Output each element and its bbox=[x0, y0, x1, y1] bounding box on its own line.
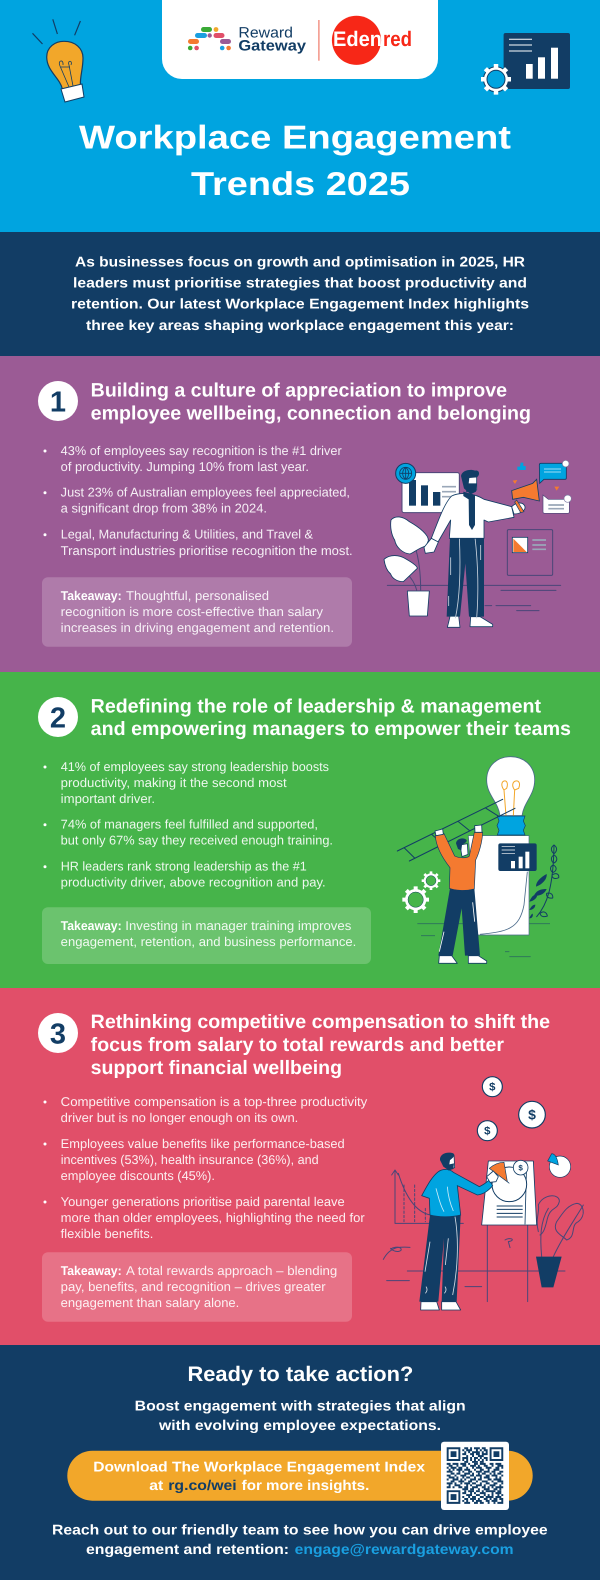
man bbox=[424, 470, 525, 627]
coins bbox=[477, 1077, 545, 1141]
intro text bbox=[71, 255, 529, 334]
bullet list 3: flexible benefits. bbox=[61, 1227, 153, 1241]
bullet list 2: HR leaders rank strong leadership as the #1 bbox=[61, 860, 307, 874]
bullet list 3: Competitive compensation is a top-three productivity bbox=[61, 1095, 368, 1109]
bullet list 1: 43% of employees say recognition is the #1 driver bbox=[61, 444, 342, 458]
heading 2: and empowering managers to empower their teams bbox=[91, 718, 571, 740]
bullet list 1: Legal, Manufacturing & Utilities, and Travel & bbox=[61, 528, 314, 542]
line chart bbox=[392, 1170, 463, 1223]
logo: Reward Gateway wordmark: Reward bbox=[238, 25, 293, 42]
chart panel bbox=[498, 843, 537, 871]
logo: Edenred: red bbox=[383, 28, 412, 51]
CTA subheading: with evolving employee expectations. bbox=[158, 1418, 441, 1434]
heading 2 bbox=[91, 696, 571, 740]
speech bubbles bbox=[513, 460, 571, 513]
board with card bbox=[507, 530, 553, 575]
bullet list 2 bbox=[44, 760, 333, 890]
plants bbox=[529, 845, 559, 918]
icon: chart with gear bbox=[481, 33, 570, 95]
takeaway 1: recognition is more cost-effective than salary bbox=[61, 605, 324, 619]
bullet list 2: 74% of managers feel fulfilled and supported, bbox=[61, 818, 318, 832]
contact text: Reach out to our friendly team to see how you can drive employee bbox=[52, 1522, 548, 1538]
bullet list 3: driver but is no longer enough on its own. bbox=[61, 1111, 298, 1125]
illustration: man with megaphone bbox=[384, 460, 571, 627]
bullet list 2: important driver. bbox=[61, 792, 155, 806]
bullet list 2: but only 67% say they received enough training. bbox=[61, 834, 333, 848]
contact text: engagement and retention: bbox=[86, 1542, 289, 1558]
takeaway 3: engagement than salary alone. bbox=[61, 1296, 239, 1310]
bullet list 3 bbox=[44, 1095, 368, 1241]
heading 3: focus from salary to total rewards and better bbox=[91, 1034, 504, 1056]
intro text: As businesses focus on growth and optimisation in 2025, HR bbox=[75, 255, 525, 271]
pie icon bbox=[548, 1154, 571, 1177]
heading 3: Rethinking competitive compensation to shift the bbox=[91, 1011, 550, 1033]
logo card bbox=[162, 0, 438, 79]
bullet list 1: a significant drop from 38% in 2024. bbox=[61, 502, 267, 516]
gears bbox=[402, 871, 440, 913]
CTA subheading bbox=[135, 1399, 466, 1434]
plant bbox=[384, 517, 429, 616]
flip chart: $ bbox=[518, 1164, 523, 1173]
panel: section 2 leadership bbox=[0, 672, 600, 988]
takeaway 1 bbox=[42, 577, 352, 647]
heading 3: support financial wellbeing bbox=[91, 1057, 342, 1079]
heading 1: Building a culture of appreciation to improve bbox=[91, 380, 507, 402]
man bbox=[435, 825, 487, 963]
bullet list 1: Transport industries prioritise recognition the most. bbox=[61, 544, 353, 558]
light bulb bbox=[487, 757, 535, 835]
title: Workplace Engagement bbox=[79, 118, 511, 155]
number badge 1: 1 bbox=[50, 386, 66, 418]
intro text: three key areas shaping workplace engagement this year: bbox=[86, 318, 514, 334]
man bbox=[419, 1153, 498, 1310]
number badge 2 bbox=[38, 697, 78, 737]
contact text: engage@rewardgateway.com bbox=[295, 1542, 514, 1558]
coins: $ bbox=[489, 1081, 496, 1093]
intro text: leaders must prioritise strategies that boost productivity and bbox=[73, 276, 527, 292]
flip chart bbox=[482, 1160, 537, 1225]
takeaway 2: Takeaway: bbox=[61, 919, 122, 933]
ladder bbox=[397, 799, 515, 861]
download pill: Download The Workplace Engagement Index bbox=[93, 1460, 425, 1476]
chart board bbox=[396, 463, 459, 513]
icon: light bulb bbox=[32, 19, 84, 102]
QR code bbox=[441, 1442, 509, 1510]
CTA heading: Ready to take action? bbox=[188, 1363, 413, 1386]
panel: section 3 compensation bbox=[0, 988, 600, 1345]
number badge 3: 3 bbox=[50, 1018, 66, 1050]
bullet list 1: of productivity. Jumping 10% from last year. bbox=[61, 460, 309, 474]
panel: header bbox=[0, 0, 600, 232]
bullet list 2: productivity driver, above recognition and pay. bbox=[61, 876, 326, 890]
bullet list 2: productivity, making it the second most bbox=[61, 776, 287, 790]
heading 2: Redefining the role of leadership & management bbox=[91, 696, 542, 718]
bullet list 3: employee discounts (45%). bbox=[61, 1169, 215, 1183]
download pill: for more insights. bbox=[242, 1478, 369, 1494]
bullet list 3: incentives (53%), health insurance (36%), and bbox=[61, 1153, 319, 1167]
illustration: man lifting ladder by light bulb bbox=[397, 757, 559, 963]
logo: Reward Gateway mark bbox=[188, 27, 231, 50]
panel: intro bbox=[0, 232, 600, 356]
illustration: man with flip chart and coins bbox=[383, 1077, 583, 1310]
download pill: rg.co/wei bbox=[168, 1478, 237, 1494]
number badge 3 bbox=[38, 1013, 78, 1053]
heading 3 bbox=[91, 1011, 550, 1079]
contact text bbox=[52, 1522, 548, 1558]
logo: Edenred bbox=[332, 16, 412, 65]
download pill: at bbox=[149, 1478, 164, 1494]
number badge 2: 2 bbox=[50, 702, 66, 734]
takeaway 2 bbox=[42, 907, 371, 964]
takeaway 3 bbox=[42, 1252, 352, 1322]
panel: section 1 recognition bbox=[0, 356, 600, 672]
bullet list 1 bbox=[44, 444, 353, 558]
panel: call to action bbox=[0, 1345, 600, 1580]
megaphone bbox=[512, 479, 539, 513]
takeaway 3: A total rewards approach – blending bbox=[126, 1264, 337, 1278]
takeaway 3: pay, benefits, and recognition – drives greater bbox=[61, 1280, 326, 1294]
download pill bbox=[67, 1451, 533, 1501]
heading 1: employee wellbeing, connection and belonging bbox=[91, 402, 531, 424]
intro text: retention. Our latest Workplace Engagement Index highlights bbox=[71, 297, 529, 313]
bullet list 3: Employees value benefits like performance-based bbox=[61, 1137, 345, 1151]
bullet list 1: Just 23% of Australian employees feel appreciated, bbox=[61, 486, 350, 500]
coins: $ bbox=[528, 1107, 536, 1123]
CTA subheading: Boost engagement with strategies that align bbox=[135, 1399, 466, 1415]
takeaway 3: Takeaway: bbox=[61, 1264, 122, 1278]
bullet list 2: 41% of employees say strong leadership boosts bbox=[61, 760, 329, 774]
title bbox=[79, 118, 511, 202]
logo: Reward Gateway wordmark: Gateway bbox=[238, 38, 307, 54]
coins: $ bbox=[484, 1125, 491, 1137]
takeaway 2: Investing in manager training improves bbox=[125, 919, 351, 933]
takeaway 1: Takeaway: bbox=[61, 589, 122, 603]
bullet list 3: Younger generations prioritise paid parental leave bbox=[61, 1195, 345, 1209]
logo: Reward Gateway wordmark bbox=[238, 25, 307, 54]
heading 1 bbox=[91, 380, 531, 424]
takeaway 1: increases in driving engagement and retention. bbox=[61, 621, 334, 635]
logo: Edenred: Eden bbox=[333, 28, 382, 51]
number badge 1 bbox=[38, 381, 78, 421]
page card bbox=[468, 836, 529, 935]
plant bbox=[536, 1196, 583, 1287]
takeaway 1: Thoughtful, personalised bbox=[126, 589, 269, 603]
title: Trends 2025 bbox=[191, 165, 410, 202]
bullet list 3: more than older employees, highlighting the need for bbox=[61, 1211, 365, 1225]
takeaway 2: engagement, retention, and business performance. bbox=[61, 935, 356, 949]
